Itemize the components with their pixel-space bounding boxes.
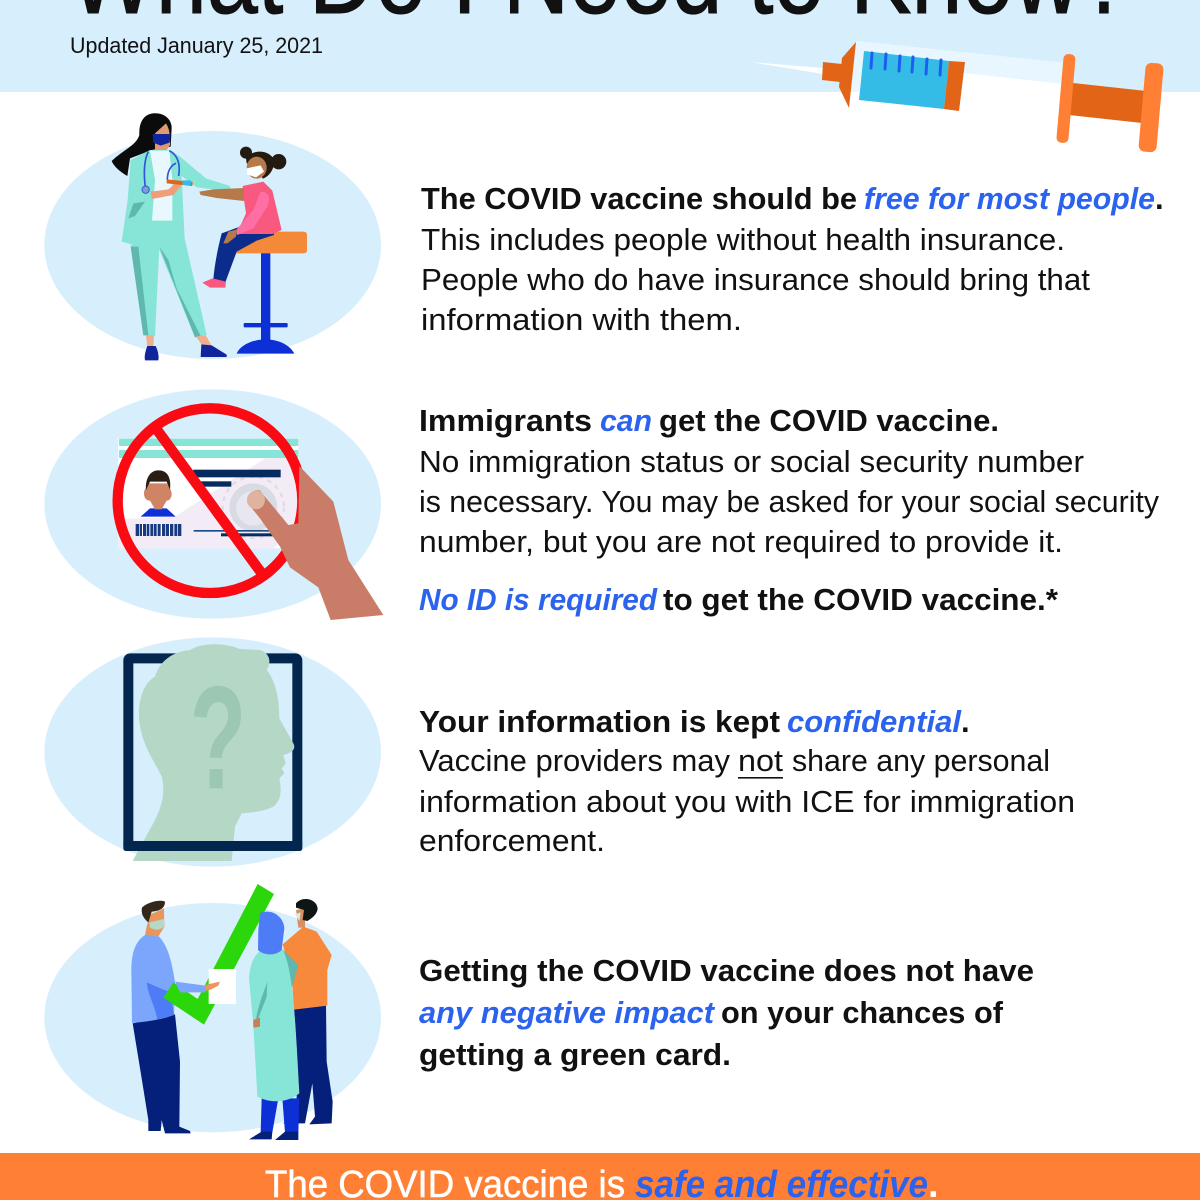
text block: free vaccine [421, 181, 1164, 337]
text block: immigrants: is necessary. You may be asked for your social security [419, 484, 1159, 519]
woman robe [249, 949, 299, 1101]
woman shoes [249, 1132, 298, 1140]
text block: immigrants: No immigration status or social security number [419, 444, 1084, 479]
text block: immigrants: Immigrants [419, 403, 592, 438]
text block: immigrants: can [600, 403, 652, 438]
doctor hair [112, 113, 172, 176]
text block: green card: on your chances of [721, 995, 1004, 1030]
left man sweater [131, 934, 175, 1023]
text block: green card: Getting the COVID vaccine does not have [419, 953, 1034, 988]
left man sleeve [175, 982, 206, 992]
frame [128, 658, 297, 846]
text block: immigrants: get the COVID vaccine. [659, 403, 999, 438]
text block: green card: getting a green card. [419, 1037, 731, 1072]
icon: syringe [750, 41, 1164, 153]
text block: confidential: share any personal [792, 743, 1050, 778]
left man head [145, 908, 164, 937]
doctor legs [131, 238, 207, 337]
doctor feet [145, 344, 227, 360]
text block: no ID [419, 582, 1059, 617]
text block: confidential: confidential [787, 704, 962, 739]
child legs [213, 227, 274, 282]
text block: confidential: Vaccine providers may [419, 743, 730, 778]
frame bottom bar [123, 841, 302, 851]
header band [0, 0, 1200, 92]
text block: green card [419, 953, 1034, 1072]
illustration: people with check mark [44, 884, 381, 1140]
left man hand [205, 982, 220, 991]
check mark [163, 884, 274, 1025]
text block: immigrants: number, but you are not required to provide it. [419, 524, 1063, 559]
text block: free vaccine: . [1155, 181, 1164, 216]
woman hijab [258, 912, 284, 954]
woman legs [261, 1098, 299, 1132]
text block: free vaccine: information with them. [421, 302, 742, 337]
text block: free vaccine: free for most people [864, 181, 1155, 216]
hand [247, 466, 383, 620]
illustration: no ID card [44, 389, 383, 620]
text block: confidential: Your information is kept [419, 704, 780, 739]
text block: confidential: enforcement. [419, 823, 605, 858]
right man shirt [283, 927, 332, 1010]
child arm [199, 188, 244, 201]
text block: confidential: . [961, 704, 970, 739]
left man legs [133, 1014, 191, 1133]
child shirt [237, 182, 282, 234]
text block: no ID: to get the COVID vaccine.* [663, 582, 1059, 617]
child head [240, 147, 286, 179]
text block: immigrants [419, 403, 1159, 559]
updated date: Updated January 25, 2021 [70, 33, 323, 58]
paper [209, 969, 236, 1004]
white shirt [150, 151, 172, 221]
right man head [295, 899, 318, 928]
illustration: head silhouette in frame [44, 637, 381, 867]
text block: green card: any negative impact [419, 995, 716, 1030]
doctor ankles [146, 335, 212, 347]
text block: free vaccine: The COVID vaccine should be [421, 181, 857, 216]
text block: free vaccine: People who do have insurance should bring that [421, 262, 1090, 297]
doctor face and mask [155, 123, 170, 153]
doctor coat [122, 150, 230, 248]
footer text [265, 1164, 939, 1200]
text block: no ID: No ID is required [419, 582, 658, 617]
prohibition sign [118, 408, 302, 593]
question mark: ? [190, 656, 246, 820]
stethoscope [144, 151, 179, 187]
illustration: doctor vaccinating child [44, 113, 381, 360]
right man legs [283, 1006, 333, 1124]
stool [236, 232, 307, 253]
id card [118, 438, 298, 548]
text block: confidential: information about you with ICE for immigration [419, 784, 1075, 819]
text block: free vaccine: This includes people without health insurance. [421, 222, 1065, 257]
woman teal shadow [282, 948, 298, 988]
doctor hand with syringe [151, 181, 182, 199]
text block: confidential: not [738, 743, 783, 778]
head silhouette [133, 644, 294, 861]
child shoes [202, 278, 226, 288]
text block: confidential [419, 704, 1075, 858]
footer band [0, 1153, 1200, 1200]
thumbnail [247, 491, 265, 509]
